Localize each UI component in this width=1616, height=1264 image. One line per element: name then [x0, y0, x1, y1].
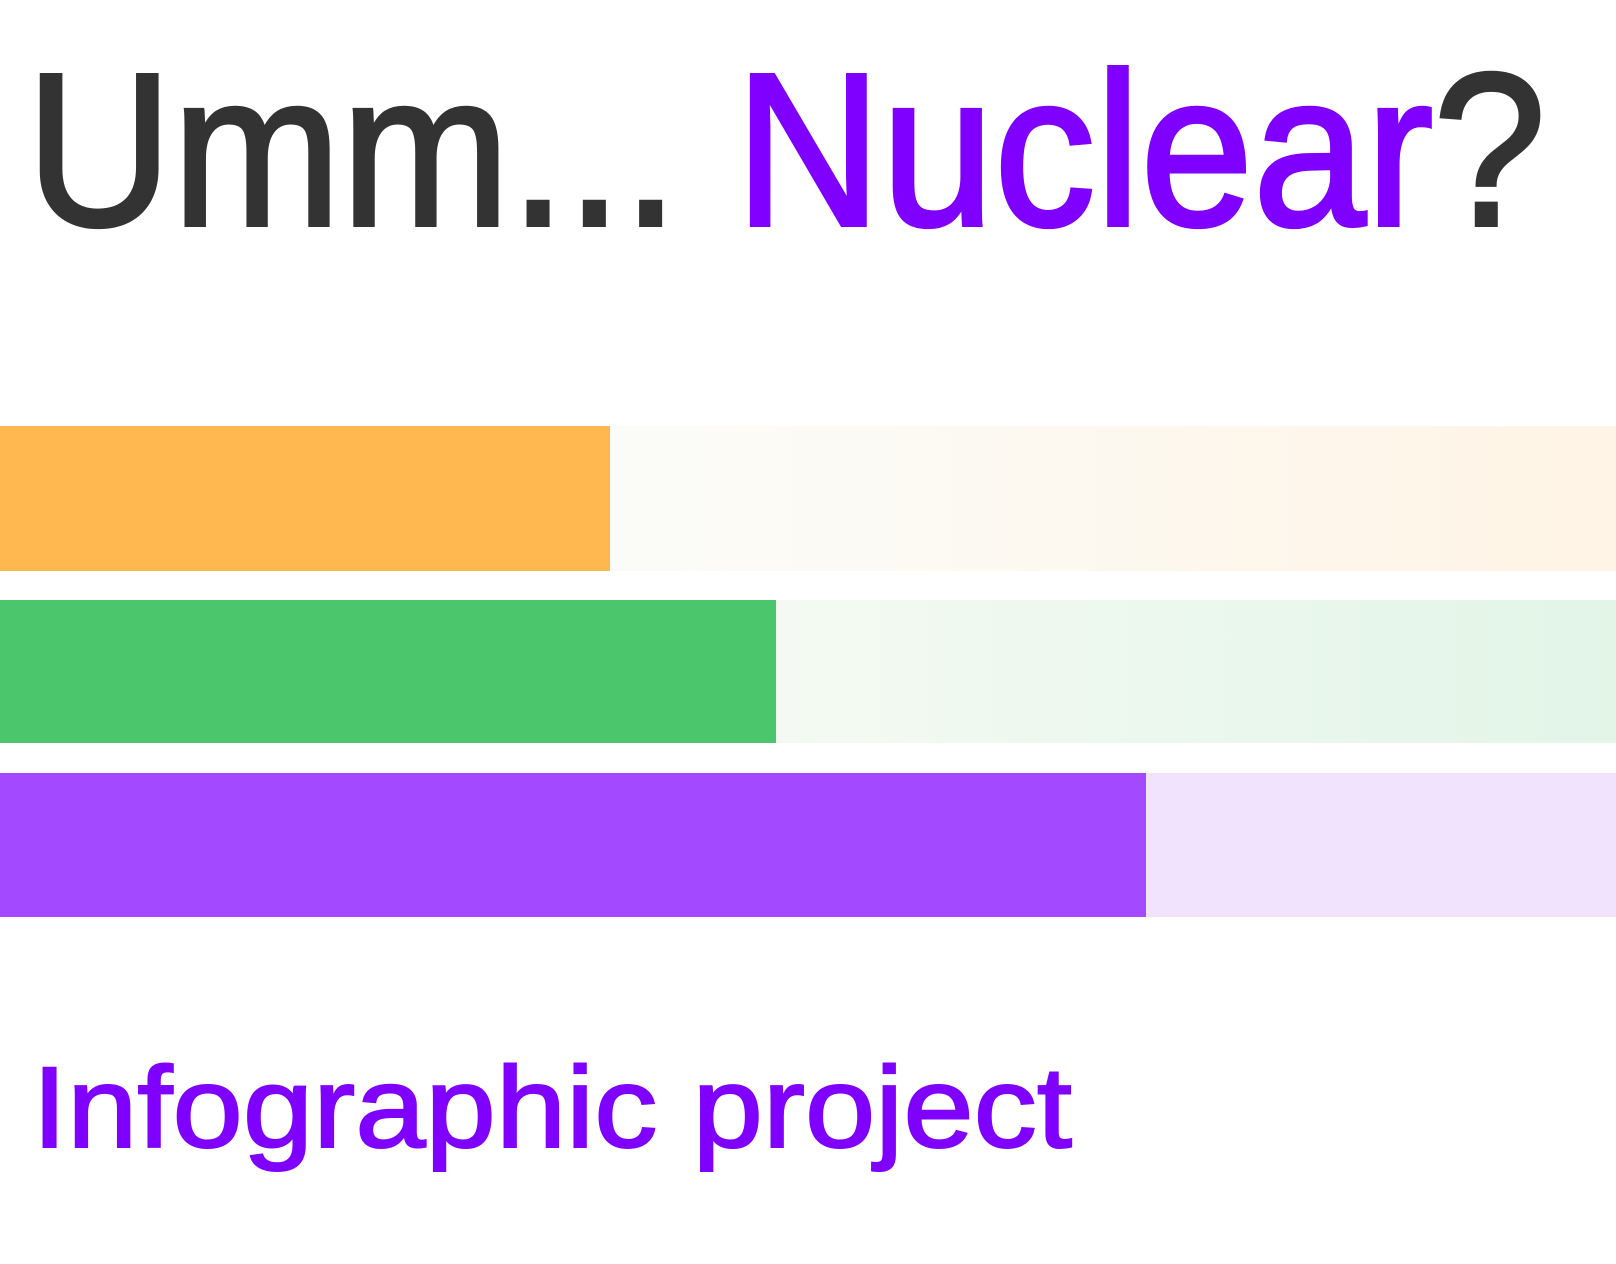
- bar: orange: [0, 426, 1616, 571]
- title: Umm... Nuclear?: [26, 29, 1546, 272]
- bar: purple: [0, 773, 1616, 917]
- bar: green: [0, 600, 1616, 743]
- subtitle: Infographic project: [32, 1044, 1072, 1172]
